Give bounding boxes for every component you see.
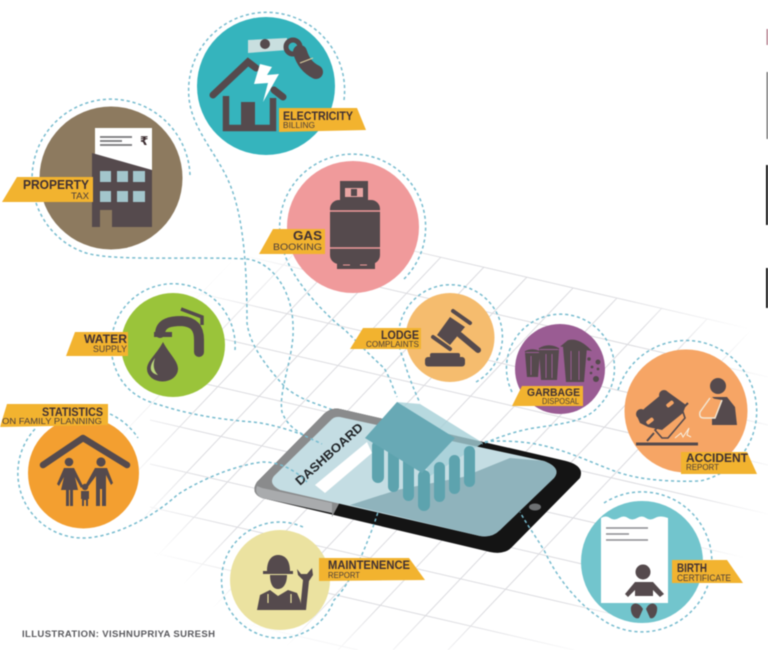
icon: gavel <box>425 311 478 366</box>
translucent roof side <box>397 402 483 476</box>
panel: electricity billing <box>197 17 366 155</box>
label: water supply <box>66 332 128 356</box>
label: birth certificate: BIRTH <box>677 561 707 575</box>
right edge bars <box>766 29 768 308</box>
label: gas booking: GAS <box>293 228 322 243</box>
panel: lodge complaints <box>350 293 494 382</box>
label: gas booking: BOOKING <box>273 242 322 253</box>
label: accident report <box>681 451 757 474</box>
screen <box>272 417 556 536</box>
label: property tax: PROPERTY <box>23 177 89 192</box>
panel: maintenence report <box>230 530 425 630</box>
icon: worker with wrench <box>257 555 313 610</box>
panel: statistics on family planning <box>0 404 139 528</box>
label: lodge complaints: LODGE <box>381 330 419 342</box>
label: lodge complaints <box>350 328 421 349</box>
panel: gas booking <box>259 161 419 293</box>
tablet dashboard <box>254 409 581 553</box>
screen shadow area <box>350 458 556 536</box>
label: electricity billing <box>279 108 366 132</box>
tablet grey frame <box>254 409 384 517</box>
icon: gas cylinder <box>330 181 380 269</box>
label: water supply: SUPPLY <box>93 344 127 354</box>
icon: overturned car <box>636 390 698 444</box>
home button <box>529 504 541 510</box>
label: accident report: ACCIDENT <box>686 451 749 465</box>
dashed connectors over tablet <box>18 314 757 638</box>
label: garbage disposal <box>512 386 583 406</box>
label: maintenence report <box>319 558 425 581</box>
panel: water supply <box>66 293 225 397</box>
label: garbage disposal: DISPOSAL <box>542 396 579 406</box>
label: statistics on family planning <box>0 404 108 427</box>
icon: building with bill <box>92 128 152 227</box>
label: property tax <box>2 177 93 202</box>
icon: tap and drop <box>147 309 202 381</box>
white bar <box>315 442 372 493</box>
label: birth certificate: CERTIFICATE <box>677 573 731 583</box>
label: electricity billing: ELECTRICITY <box>283 111 353 123</box>
panel: property tax <box>2 106 182 250</box>
label: accident report: REPORT <box>686 462 719 472</box>
label: lodge complaints: COMPLAINTS <box>366 340 419 349</box>
label: birth certificate <box>672 560 743 583</box>
label: maintenence report: MAINTENENCE <box>328 558 410 572</box>
columns <box>372 440 475 511</box>
label: maintenence report: REPORT <box>328 570 360 580</box>
panel: birth certificate <box>581 501 743 623</box>
icon: certificate with baby <box>601 516 668 618</box>
icon: injured person <box>700 378 737 425</box>
dashed ring connectors under circles <box>32 12 502 445</box>
icon: government building <box>365 402 483 511</box>
credit line: ILLUSTRATION: VISHNUPRIYA SURESH <box>22 629 215 640</box>
label: statistics on family planning: ON FAMILY PLANNING <box>2 416 102 426</box>
panel: accident report <box>624 350 757 474</box>
label: property tax: TAX <box>71 191 90 202</box>
icon: garbage bins <box>525 340 600 382</box>
label: water supply: WATER <box>84 332 127 346</box>
icon: building with bill: ₹ <box>140 134 148 148</box>
panel: garbage disposal <box>512 324 605 414</box>
label: gas booking <box>259 228 325 254</box>
label: statistics on family planning: STATISTICS <box>42 407 103 419</box>
dashboard label: DASHBOARD <box>293 420 366 488</box>
icon: family under roof <box>43 438 127 506</box>
icon: house with bolt and bill <box>213 38 316 128</box>
label: garbage disposal: GARBAGE <box>527 387 580 399</box>
tablet body <box>254 409 581 553</box>
label: electricity billing: BILLING <box>283 120 315 130</box>
roof <box>365 402 455 473</box>
